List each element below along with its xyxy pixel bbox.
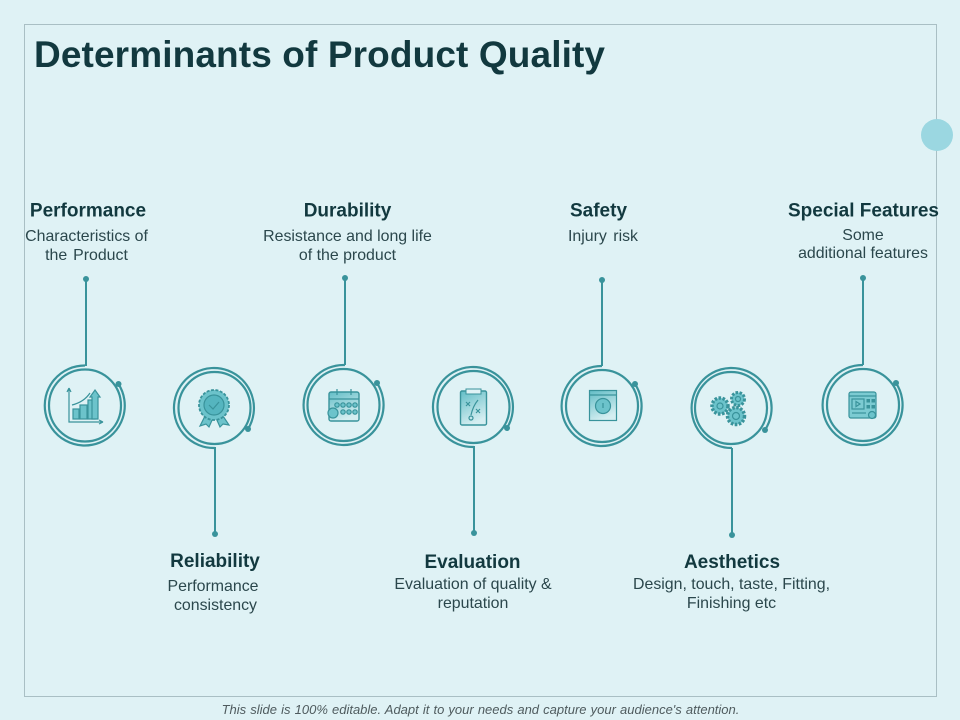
icon: calendar <box>328 389 359 421</box>
panel: evaluation <box>394 367 552 612</box>
text: evaluation description: reputation <box>438 595 508 612</box>
connector with ring <box>174 368 254 537</box>
connector with ring <box>692 368 772 538</box>
heading: reliability: Reliability <box>170 551 260 572</box>
connector with ring <box>433 367 513 536</box>
connector with ring <box>45 276 125 445</box>
connector with ring <box>823 275 903 445</box>
heading: durability: Durability <box>304 200 392 222</box>
heading: performance: Performance <box>30 200 146 222</box>
icon: award ribbon <box>199 390 229 427</box>
text: durability description: of the product <box>299 247 397 264</box>
text: aesthetics description: Finishing etc <box>687 595 776 612</box>
heading: aesthetics: Aesthetics <box>684 552 780 573</box>
panel: safety <box>562 200 642 446</box>
icon: bar chart <box>67 388 103 424</box>
text: reliability description: Performance <box>168 578 258 595</box>
text: special features description: Some <box>842 227 884 244</box>
text: performance description: the Product <box>45 247 128 264</box>
decorative circle badge <box>921 119 953 151</box>
text: safety description: Injury risk <box>568 228 638 245</box>
text: performance description: Characteristics of <box>25 228 148 245</box>
icon: gears <box>712 392 744 424</box>
footer note: This slide is 100% editable. Adapt it to your needs and capture your audience's attention. <box>222 702 739 717</box>
icon: clipboard <box>460 389 486 425</box>
text: durability description: Resistance and long life <box>263 228 432 245</box>
connector with ring <box>562 277 642 446</box>
icon: browser window <box>849 392 876 418</box>
title: Determinants of Product Quality <box>34 34 605 75</box>
text: special features description: additional features <box>798 245 928 262</box>
panel: aesthetics <box>633 368 830 612</box>
heading: evaluation: Evaluation <box>424 552 521 573</box>
text: aesthetics description: Design, touch, taste, Fitting, <box>633 576 830 593</box>
panel: durability <box>263 200 432 445</box>
panel: special features <box>788 200 939 445</box>
heading: safety: Safety <box>570 200 627 222</box>
panel: reliability <box>168 368 260 614</box>
panel: performance <box>25 200 148 445</box>
icon: warning box <box>590 390 616 420</box>
text: reliability description: consistency <box>174 597 257 614</box>
text: evaluation description: Evaluation of quality & <box>394 576 552 593</box>
heading: special features: Special Features <box>788 200 939 222</box>
connector with ring <box>304 275 384 445</box>
